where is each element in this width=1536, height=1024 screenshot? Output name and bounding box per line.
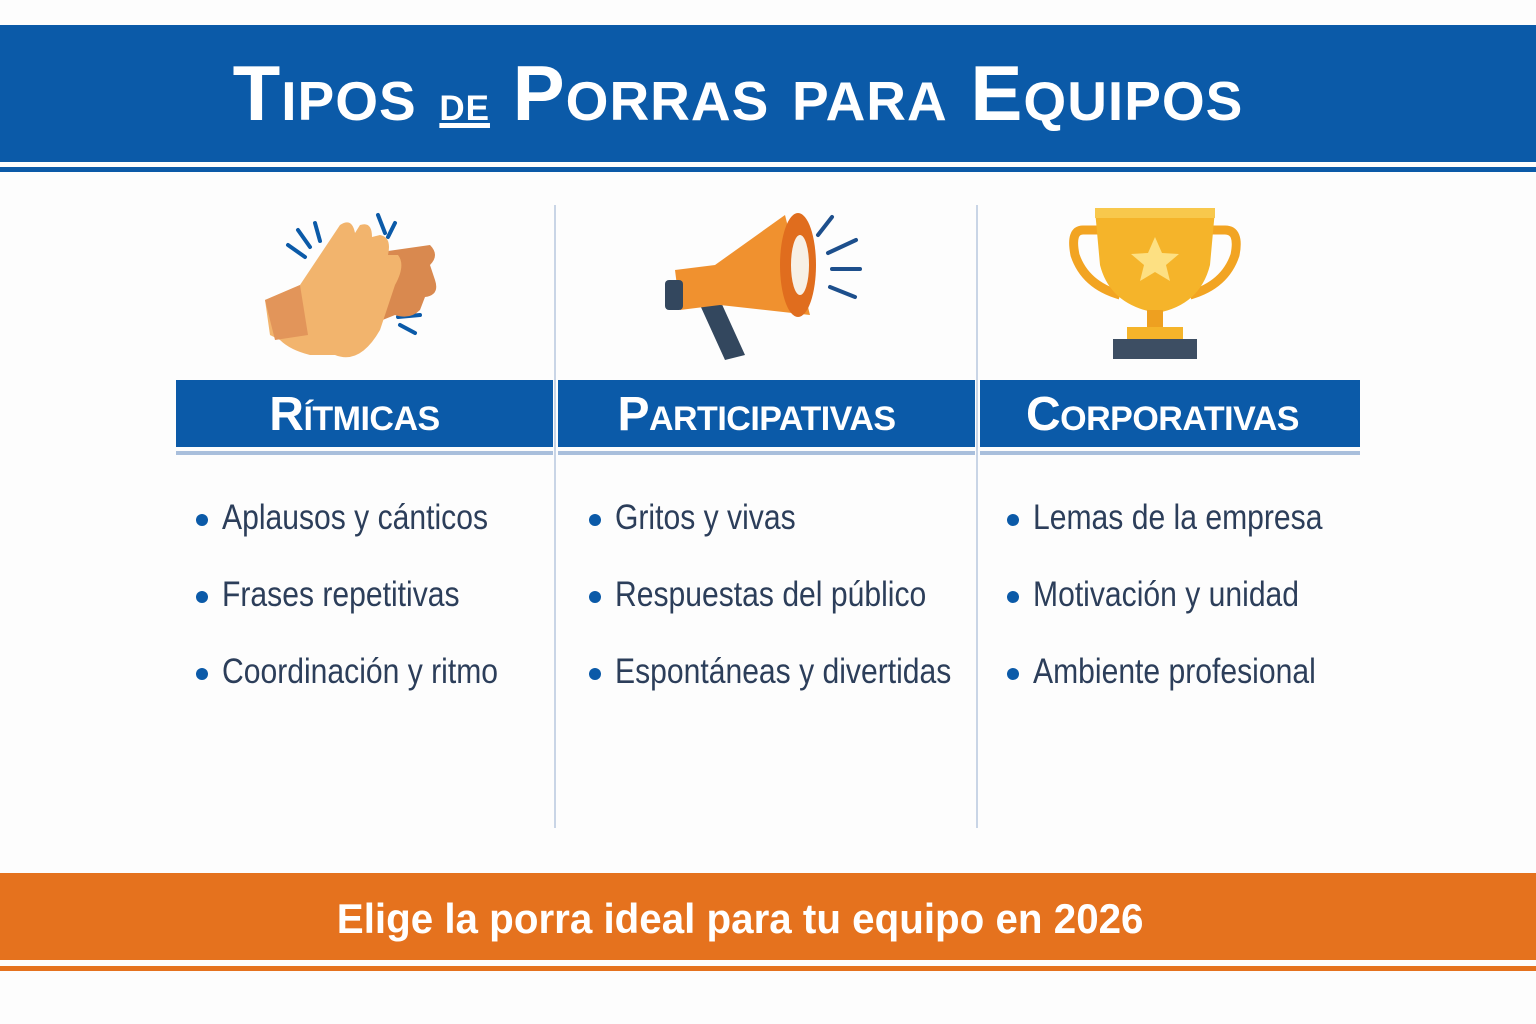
title banner: Tipos de Porras para Equipos (233, 49, 1243, 137)
icon: clapping hands (265, 212, 436, 358)
header: Corporativas: Corporativas (1026, 388, 1299, 441)
header: Participativas: Participativas (617, 388, 896, 441)
list: participativas: Respuestas del público (615, 575, 926, 614)
footer banner (0, 873, 1536, 960)
icon: trophy (1069, 208, 1241, 359)
list: participativas: Espontáneas y divertidas (615, 652, 951, 691)
list: corporativas: Lemas de la empresa (1033, 498, 1322, 537)
list: participativas: Gritos y vivas (615, 498, 796, 537)
list: participativas (589, 498, 951, 691)
list: ritmicas (196, 498, 498, 691)
footer banner: Elige la porra ideal para tu equipo en 2026 (337, 895, 1143, 942)
list: corporativas: Ambiente profesional (1033, 652, 1316, 691)
list: corporativas (1007, 498, 1322, 691)
list: corporativas: Motivación y unidad (1033, 575, 1299, 614)
header: Participativas (558, 380, 975, 447)
list: ritmicas: Aplausos y cánticos (222, 498, 488, 537)
header: Ritmicas (176, 380, 553, 447)
list: ritmicas: Frases repetitivas (222, 575, 460, 614)
list: ritmicas: Coordinación y ritmo (222, 652, 498, 691)
icon: megaphone (665, 213, 862, 360)
title banner (0, 25, 1536, 162)
header: Ritmicas: Rítmicas (269, 388, 440, 441)
header: Corporativas (980, 380, 1360, 447)
